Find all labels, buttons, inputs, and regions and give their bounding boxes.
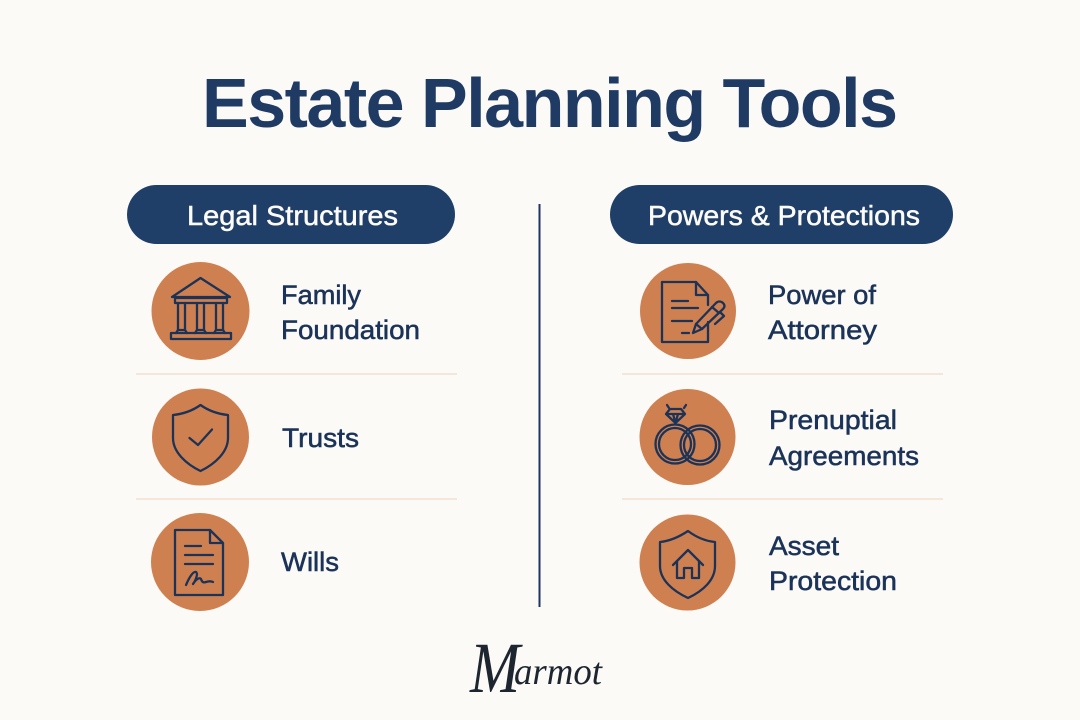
header: legal structures: Legal Structures bbox=[187, 200, 398, 231]
icon: shield with check bbox=[173, 405, 228, 471]
icon: document and pen bbox=[662, 282, 724, 342]
label: family foundation: Family bbox=[281, 280, 362, 310]
label: asset protection: Asset bbox=[769, 531, 840, 561]
label: trusts: Trusts bbox=[282, 423, 359, 453]
logo: marmot signature: armot bbox=[514, 651, 603, 693]
label: power of attorney: Attorney bbox=[768, 315, 878, 345]
panel: powers and protections bbox=[610, 185, 953, 610]
panel: legal structures bbox=[127, 185, 457, 611]
label: power of attorney: Power of bbox=[768, 280, 876, 310]
label: family foundation: Foundation bbox=[281, 315, 420, 345]
icon: classical building bbox=[171, 278, 231, 339]
icon: wedding rings bbox=[656, 405, 720, 464]
header: powers and protections: Powers & Protections bbox=[648, 200, 920, 231]
item: family foundation bbox=[152, 262, 420, 360]
logo: marmot signature: M bbox=[469, 628, 523, 708]
label: wills: Wills bbox=[281, 547, 339, 577]
item: wills bbox=[151, 513, 339, 611]
item: trusts bbox=[152, 388, 359, 486]
label: asset protection: Protection bbox=[769, 566, 897, 596]
item: prenuptial agreements bbox=[640, 389, 919, 485]
item: power of attorney bbox=[640, 263, 878, 359]
title: Estate Planning Tools bbox=[202, 64, 898, 142]
item: asset protection bbox=[640, 514, 897, 610]
icon: signed document bbox=[175, 530, 223, 595]
icon: shield with house bbox=[660, 531, 715, 598]
center divider bbox=[538, 204, 540, 607]
label: prenuptial agreements: Prenuptial bbox=[769, 405, 897, 435]
label: prenuptial agreements: Agreements bbox=[769, 441, 919, 471]
header: legal structures bbox=[127, 185, 455, 244]
header: powers and protections bbox=[610, 185, 953, 244]
